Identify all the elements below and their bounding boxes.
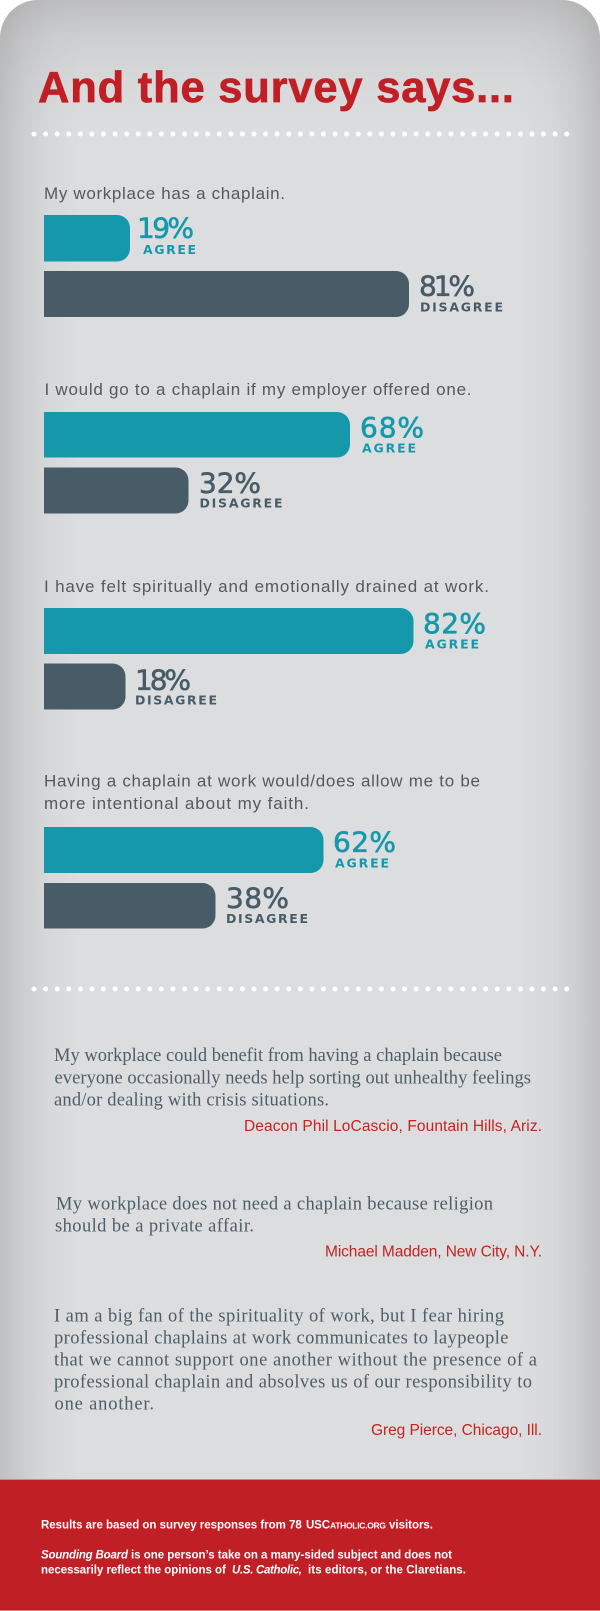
quote 2 (55, 1194, 542, 1261)
question text 3: I have felt spiritually and emotionally drained at work. (44, 577, 489, 596)
quote 1: and/or dealing with crisis situations. (54, 1090, 329, 1110)
label: 19% agree: 19% (137, 211, 194, 244)
label: 68% agree: 68% (360, 411, 424, 444)
footer text: USC (306, 1520, 330, 1532)
question text 4: Having a chaplain at work would/does allow me to be (44, 772, 480, 791)
quote 3 (54, 1306, 542, 1439)
label: 18% disagree (135, 663, 217, 708)
label: 82% agree: AGREE (425, 637, 479, 652)
label: 32% disagree: 32% (199, 466, 261, 499)
quote 2: Michael Madden, New City, N.Y. (325, 1244, 542, 1261)
label: 32% disagree: DISAGREE (200, 496, 282, 511)
quote 1: everyone occasionally needs help sorting out unhealthy feelings (54, 1068, 531, 1088)
bar: 18% disagree (44, 664, 126, 710)
title: And the survey says... (38, 64, 514, 112)
bar: 68% agree (44, 412, 350, 458)
quote 2: My workplace does not need a chaplain because religion (56, 1194, 493, 1214)
footer text: its editors, or the Claretians. (308, 1565, 466, 1577)
label: 62% agree: 62% (333, 826, 396, 859)
quote 2: should be a private affair. (55, 1216, 254, 1236)
footer text: Sounding Board (41, 1550, 129, 1562)
panel: question 1 (44, 184, 503, 317)
quote 3: that we cannot support one another without the presence of a (54, 1350, 537, 1370)
footer text: U.S. Catholic, (232, 1565, 302, 1577)
footer text: visitors. (389, 1520, 433, 1532)
label: 38% disagree: DISAGREE (226, 911, 308, 926)
label: 18% disagree: DISAGREE (135, 693, 217, 708)
quote 1 (54, 1046, 542, 1135)
label: 62% agree: AGREE (335, 855, 389, 870)
question text 2: I would go to a chaplain if my employer offered one. (44, 380, 472, 399)
quote 3: professional chaplain and absolves us of our responsibility to (54, 1372, 532, 1392)
panel: question 3 (44, 577, 489, 710)
label: 18% disagree: 18% (135, 663, 191, 696)
footer text: Results are based on survey responses from 78 (41, 1520, 305, 1532)
label: 38% disagree: 38% (226, 882, 289, 915)
quote 3: Greg Pierce, Chicago, Ill. (371, 1422, 542, 1439)
label: 19% agree: AGREE (143, 242, 196, 257)
panel: question 4 (44, 772, 480, 928)
question text 4 (44, 772, 480, 813)
footer band (0, 1479, 600, 1611)
question text 4: more intentional about my faith. (44, 794, 309, 813)
footer text: ATHOLIC.ORG (330, 1521, 386, 1531)
label: 38% disagree (226, 882, 308, 926)
label: 19% agree (137, 211, 196, 257)
label: 81% disagree (419, 269, 503, 315)
bar: 19% agree (44, 215, 130, 262)
bar: 82% agree (44, 608, 414, 654)
quote 3: professional chaplains at work communicates to laypeople (54, 1328, 508, 1348)
quote 3: one another. (54, 1394, 154, 1414)
bar: 81% disagree (44, 271, 409, 317)
bar: 32% disagree (44, 468, 188, 514)
footer text: necessarily reflect the opinions of (41, 1565, 229, 1577)
quote 3: I am a big fan of the spirituality of work, but I fear hiring (54, 1306, 504, 1326)
label: 32% disagree (199, 466, 282, 511)
quote 1: Deacon Phil LoCascio, Fountain Hills, Ariz. (244, 1118, 542, 1135)
bar: 62% agree (44, 827, 324, 873)
bar: 38% disagree (44, 883, 216, 928)
footer text: is one person’s take on a many-sided subject and does not (131, 1550, 452, 1562)
label: 81% disagree: 81% (419, 269, 475, 302)
label: 82% agree: 82% (423, 607, 486, 640)
footer text (41, 1520, 466, 1577)
label: 68% agree: AGREE (362, 441, 416, 456)
panel: question 2 (44, 380, 472, 514)
label: 81% disagree: DISAGREE (420, 300, 503, 315)
question text 1: My workplace has a chaplain. (44, 184, 285, 203)
quote 1: My workplace could benefit from having a chaplain because (54, 1046, 502, 1066)
